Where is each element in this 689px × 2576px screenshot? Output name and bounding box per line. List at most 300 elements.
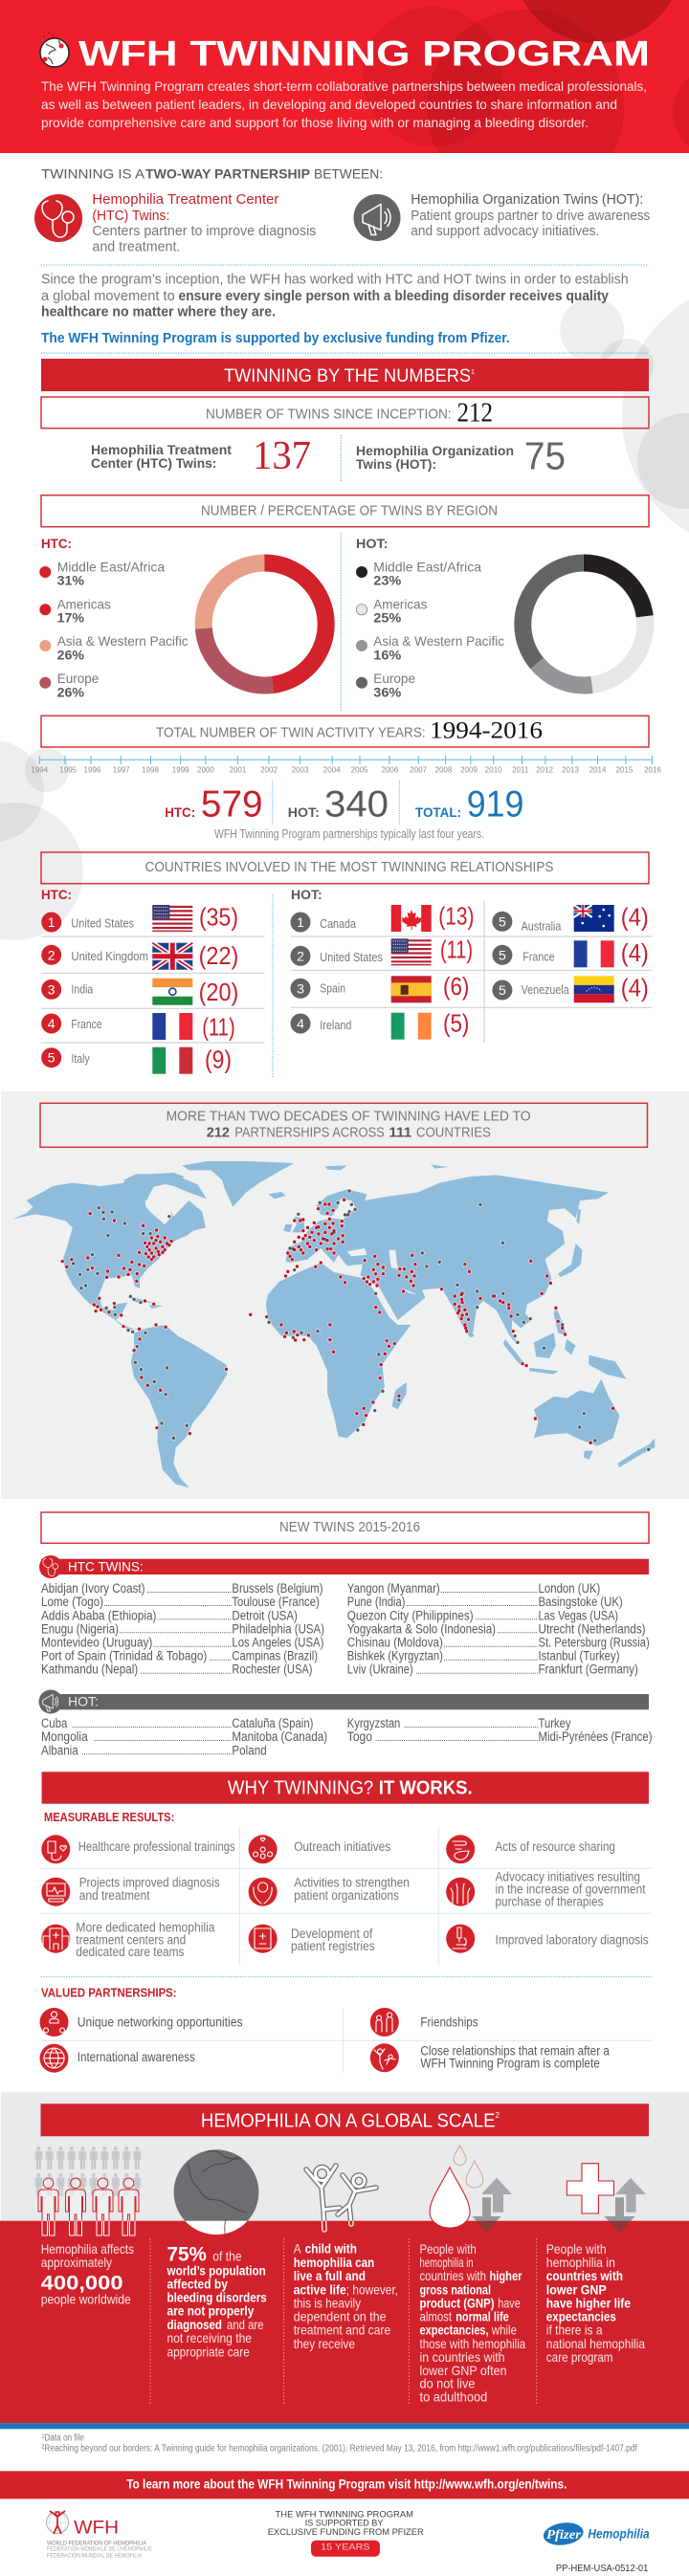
text: lower GNP: care program [546,2349,613,2365]
text: outreach: Outreach initiatives [294,1839,390,1854]
HTC twins text: Hemophilia Treatment Center [92,192,279,208]
text: advocacy: purchase of therapies [496,1894,604,1908]
donut chart: HTC [204,562,326,685]
text: laboratory: Improved laboratory diagnosis [496,1932,649,1947]
list: new HTC twins: Port of Spain (Trinidad & Tobago) [41,1649,207,1663]
bar: HTC twins: HTC TWINS: [68,1559,144,1574]
text: lower GNP: lower GNP [546,2281,607,2297]
icon: children jumping [370,2043,399,2072]
box: partnerships heading: MORE THAN TWO DECADES OF TWINNING HAVE LED TO [167,1109,531,1125]
icon: raised hands [446,1878,475,1906]
text: child with hemophilia: hemophilia can [294,2255,374,2270]
icon: registry book [249,1925,278,1953]
heading: measurable results: MEASURABLE RESULTS: [44,1810,174,1824]
timeline: 1998 [142,766,159,775]
footnotes: ¹Data on file [42,2433,84,2444]
HTC country ranking: (11) [202,1012,235,1041]
HOT country ranking: (6) [443,972,469,1001]
list: new HTC twins: Frankfurt (Germany) [538,1662,638,1677]
logo: Pfizer Hemophilia [542,2521,650,2547]
list: new HTC twins: Toulouse (France) [232,1595,320,1609]
stat: HOT years: 340 [324,784,389,825]
list: new HTC twins: Lviv (Ukraine) [347,1662,413,1677]
icon: hands with globe [249,1878,278,1906]
icon: hospital [41,1925,70,1953]
partnership heading [41,166,383,182]
note: partnerships last: WFH Twinning Program partnerships typically last four years. [214,827,484,841]
list: new HTC twins: Quezon City (Philippines) [347,1608,474,1622]
HTC region legend [39,536,188,699]
HOT region legend: Europe [373,671,415,686]
text: 75 percent: appropriate care [167,2344,250,2359]
text: 400,000 people: approximately [41,2255,112,2270]
text: activities: patient organizations [294,1888,399,1903]
intro text: as well as between patient leaders, in developing and developed countries to share information and [41,97,617,112]
text: higher GNP: product (GNP) [419,2295,495,2310]
stat: HTC years: HTC: [165,804,195,820]
text: registries [291,1926,375,1953]
HOT country ranking: (11) [440,936,473,964]
list: new HTC twins: Rochester (USA) [232,1662,312,1677]
HTC region legend: Americas [57,596,111,611]
icon: outreach [249,1835,278,1863]
text: child with hemophilia: live a full and [294,2268,366,2283]
box: countries [41,852,649,884]
text: advocacy [496,1870,646,1908]
HOT country ranking: (13) [438,902,475,931]
text: 75 percent: bleeding disorders [167,2290,267,2305]
HTC country ranking: 3 [48,981,56,997]
logo: WFH: FEDERACIÓN MUNDIAL DE HEMOFILIA [47,2550,143,2559]
heading: valued partnerships: VALUED PARTNERSHIPS: [41,1986,177,2000]
text: 75 percent: not receiving the [167,2330,252,2345]
text: 400,000 people: Hemophilia affects [41,2241,134,2257]
text: higher GNP: normal life [456,2309,509,2324]
list: new HTC twins: Lome (Togo) [41,1595,103,1609]
HTC country ranking: India [71,981,94,996]
timeline: 2015 [616,766,633,775]
bar: HOT: HOT: [68,1693,99,1708]
timeline: 2014 [589,766,607,775]
list: new HOT twins: Kyrgyzstan [347,1716,400,1730]
logo: Pfizer Hemophilia: Pfizer [546,2528,582,2543]
HTC country ranking: (20) [199,978,238,1006]
HOT country ranking: (5) [443,1008,469,1037]
icon: globe [40,33,69,67]
timeline: 1999 [172,766,189,775]
text: dedicated centers [76,1920,215,1959]
text: higher GNP: expectancies, [419,2323,489,2338]
timeline: 1997 [113,766,130,775]
HTC region legend: Middle East/Africa [57,559,165,574]
text: lower GNP: hemophilia in [546,2255,615,2270]
list: new HTC twins: Campinas (Brazil) [232,1649,318,1663]
HTC region legend: 26% [57,647,85,662]
list: new HTC twins: Addis Ababa (Ethiopia) [41,1608,157,1622]
text: close relationships: WFH Twinning Program is complete [420,2057,600,2071]
intro text: The WFH Twinning Program creates short-term collaborative partnerships between medical professionals, [41,78,647,94]
text: advocacy: Advocacy initiatives resulting [496,1870,640,1884]
logo: WFH: WFH [74,2518,119,2538]
list: new HOT twins: Albania [41,1743,78,1757]
text: higher GNP: countries with [419,2268,486,2283]
list: new HTC twins: Abidjan (Ivory Coast) [41,1581,145,1596]
timeline: 2005 [351,766,368,775]
HOT country ranking: (4) [621,938,649,967]
stat: total years: TOTAL: [415,804,461,820]
text: 75 percent [167,2243,267,2359]
icon: monitor [41,1878,70,1906]
text: dedicated centers: dedicated care teams [76,1945,185,1959]
inception paragraph: ensure every single person with a bleeding disorder receives quality [178,289,609,304]
icon: blood bag [41,1835,70,1863]
HOT region legend [356,536,504,699]
title: WFH TWINNING PROGRAM [78,34,650,73]
text: lower GNP: have higher life [546,2295,631,2310]
logo: WFH [46,2511,152,2559]
partnership heading: TWO-WAY PARTNERSHIP [145,166,310,182]
logo: WFH: WORLD FEDERATION OF HEMOPHILIA [47,2540,147,2546]
timeline: 2013 [562,766,579,775]
HOT region legend: Middle East/Africa [373,559,481,574]
box: new twins: NEW TWINS 2015-2016 [279,1519,420,1535]
text: advocacy: in the increase of government [496,1882,646,1896]
HOT region legend: 36% [373,684,402,699]
HTC twins text [92,192,316,255]
banner: why twinning: IT WORKS. [379,1778,473,1799]
HTC country ranking: (22) [199,941,238,970]
icon: resource sharing [446,1835,475,1863]
text: child with hemophilia [294,2241,398,2351]
text: higher GNP: to adulthood [419,2389,487,2405]
text: lower GNP [546,2241,645,2365]
intro text [41,78,647,130]
HOT country ranking: Australia [522,919,562,934]
text: 75 percent: 75% [167,2243,207,2265]
list: new HTC twins: Brussels (Belgium) [232,1581,323,1596]
HOT country ranking: (4) [621,974,649,1002]
box: activity years: 1994-2016 [430,718,543,744]
text: higher GNP: in countries with [419,2349,505,2365]
text: projects: and treatment [79,1888,150,1903]
timeline [31,756,661,775]
icon: cross [567,2164,614,2213]
icon: globe [40,2044,69,2073]
HOT country ranking: 1 [297,914,304,930]
timeline: 2012 [536,766,553,775]
box: partnerships heading: 212 [207,1124,230,1140]
box: twins by region [41,495,649,527]
stat: HOT years: HOT: [288,804,320,820]
partnership heading: TWINNING IS A [41,166,145,182]
text: lower GNP: if there is a [546,2323,603,2338]
text: 75 percent: are not properly [167,2303,255,2319]
text: child with hemophilia: child with [305,2241,357,2257]
banner: twinning by the numbers: TWINNING BY THE NUMBERS [224,365,471,386]
list: new HTC twins: Yangon (Myanmar) [347,1581,440,1596]
partnership heading: BETWEEN: [314,166,383,182]
decorative grey circles right [560,281,689,551]
stat: HTC twins 137: Center (HTC) Twins: [91,455,216,471]
text: child with hemophilia: they receive [294,2336,355,2351]
text: 400,000 people: people worldwide [41,2291,131,2306]
box: partnerships heading [40,1103,647,1147]
text: child with hemophilia: ; however, [346,2281,398,2297]
HOT region legend: 16% [373,647,402,662]
timeline: 2009 [460,766,478,775]
icon: blood drops [430,2146,483,2228]
list: new HOT twins [41,1716,653,1757]
list: new HTC twins: Istanbul (Turkey) [538,1649,620,1663]
list: new HTC twins: Chisinau (Moldova) [347,1636,443,1650]
funding statement footer: THE WFH TWINNING PROGRAM [276,2510,413,2521]
text: 75 percent: and are [227,2317,264,2332]
HOT country ranking: 5 [499,914,506,929]
box: number of twins [41,397,649,429]
HTC country ranking: 2 [48,947,56,962]
timeline: 2006 [381,766,399,775]
banner: twinning by the numbers: 1 [471,369,475,376]
funding statement: The WFH Twinning Program is supported by exclusive funding from Pfizer. [41,331,510,346]
banner: twinning by the numbers [41,359,649,391]
text: lower GNP: national hemophilia [546,2336,645,2351]
text: higher GNP: those with hemophilia [419,2336,525,2351]
call to action band [0,2471,689,2499]
box: number of twins: NUMBER OF TWINS SINCE INCEPTION: [206,406,452,422]
inception paragraph: healthcare no matter where they are. [41,305,276,320]
HOT twins text: Hemophilia Organization Twins (HOT): [411,192,643,208]
list: new HOT twins: Turkey [538,1716,571,1730]
timeline: 2010 [485,766,502,775]
HTC country ranking: 5 [48,1050,56,1066]
text: 75 percent: of the [212,2248,242,2263]
HOT twins text [411,192,650,239]
HTC twins text: Centers partner to improve diagnosis [92,224,316,239]
stat: total years: 919 [467,784,523,825]
HTC country ranking: 4 [48,1016,56,1031]
stat: HTC twins 137 [91,434,311,478]
HTC twins text: (HTC) Twins: [92,209,169,224]
text: lower GNP: People with [546,2241,607,2257]
text: higher GNP: higher [490,2268,522,2283]
badge: 15 years [311,2541,380,2557]
timeline: 2007 [410,766,428,775]
panel: world map [1,1091,689,1499]
text: 400,000 people [41,2241,134,2306]
HTC country ranking: (9) [205,1046,232,1074]
icon: people [34,2147,141,2235]
donut chart: HOT [522,562,645,685]
list: new HTC twins: Yogyakarta & Solo (Indonesia) [347,1621,496,1636]
panel: hemophilia on a global scale [0,2092,689,2429]
timeline: 2002 [260,766,278,775]
box: number of twins: 212 [457,399,493,429]
timeline: 2011 [512,766,529,775]
timeline: 1995 [59,766,78,775]
icon: networking [40,2008,69,2037]
box: new twins [41,1512,649,1543]
funding statement footer: EXCLUSIVE FUNDING FROM PFIZER [268,2527,424,2538]
text: child with hemophilia: this is heavily [294,2295,361,2310]
text: 75 percent: world’s population [167,2262,266,2278]
logo: Pfizer Hemophilia: Hemophilia [588,2525,650,2541]
box: partnerships heading: PARTNERSHIPS ACROSS [234,1124,385,1140]
list: new HTC twins: Utrecht (Netherlands) [538,1621,646,1636]
stat: HOT twins 75: Twins (HOT): [356,456,436,472]
list: new HTC twins: Pune (India) [347,1595,405,1609]
stat: HOT twins 75: Hemophilia Organization [356,443,514,458]
text: networking: Unique networking opportunities [78,2015,243,2029]
document code: PP-HEM-USA-0512-01 [556,2563,648,2574]
text: higher GNP: hemophilia in [419,2255,474,2270]
footnotes [42,2433,637,2454]
stat: HOT twins 75: 75 [524,434,566,478]
text: child with hemophilia: treatment and care [294,2323,390,2338]
text: projects [79,1876,220,1903]
HOT region legend: HOT: [356,536,389,551]
stat: total years [415,784,523,825]
icon: megaphone [354,194,400,241]
text: higher GNP: have [498,2295,521,2310]
stat: HTC twins 137: 137 [253,434,311,478]
HOT country ranking: Ireland [320,1018,351,1032]
list: new HOT twins: Cuba [41,1716,68,1730]
text: lower GNP: countries with [546,2268,623,2283]
HOT country ranking: 5 [499,947,506,962]
stat: HOT years [288,784,389,825]
stat: HTC years [165,784,263,825]
text: child with hemophilia: A [294,2241,301,2257]
list: new HTC twins: Basingstoke (UK) [538,1595,623,1609]
HTC country ranking: United Kingdom [71,949,148,963]
HTC region legend: HTC: [41,536,72,551]
HOT country ranking: France [522,949,555,963]
HOT twins text: Patient groups partner to drive awareness [411,209,650,224]
stat: HTC years: 579 [201,784,263,825]
list: new HTC twins [41,1581,650,1677]
text: trainings: Healthcare professional trainings [78,1839,235,1854]
text: registries: patient registries [291,1939,375,1953]
inception paragraph: Since the program’s inception, the WFH has worked with HTC and HOT twins in order to establish [41,273,629,288]
badge: 15 years: 15 YEARS [321,2543,370,2553]
stat: HOT twins 75 [356,434,566,478]
text: child with hemophilia: active life [294,2281,346,2297]
timeline: 2016 [644,766,661,775]
HOT region legend: 25% [373,610,402,626]
HOT region legend: Asia & Western Pacific [373,633,504,649]
HOT country ranking: HOT: [291,887,322,902]
inception paragraph: a global movement to [41,289,175,304]
funding statement footer: IS SUPPORTED BY [305,2519,384,2529]
icon: globe americas [174,2149,258,2235]
HOT country ranking: United States [320,950,383,964]
list: new HTC twins: Los Angeles (USA) [232,1636,323,1650]
stat: HTC twins 137: Hemophilia Treatment [91,442,232,457]
icon: children [306,2166,376,2230]
text: higher GNP: lower GNP often [419,2363,507,2378]
text: 75 percent: affected by [167,2276,228,2291]
list: new HTC twins: Philadelphia (USA) [232,1621,324,1636]
HOT twins text: and support advocacy initiatives. [411,224,599,239]
timeline: 2008 [435,766,453,775]
text: activities [294,1876,410,1903]
HOT country ranking: 3 [297,980,304,996]
HTC region legend: 26% [57,684,85,699]
timeline: 2003 [292,766,309,775]
text: higher GNP: while [491,2323,517,2338]
text: close relationships: Close relationships that remain after a [420,2043,610,2058]
text: friendships: Friendships [420,2015,478,2029]
list: new HTC twins: Kathmandu (Nepal) [41,1662,138,1677]
timeline: 1994 [31,766,49,775]
HOT country ranking: Canada [320,916,357,931]
HOT country ranking [291,887,649,1040]
icon: stethoscope [34,194,82,242]
text: 400,000 people: 400,000 [41,2272,123,2294]
HTC country ranking: United States [71,915,134,930]
header panel [0,0,689,153]
text: higher GNP: almost [419,2309,452,2324]
text: dedicated centers: treatment centers and [76,1932,186,1947]
bar: HTC twins [39,1555,649,1578]
icon: up and down arrows [473,2178,512,2233]
list: new HTC twins: Bishkek (Kyrgyztan) [347,1649,443,1663]
list: new HTC twins: Detroit (USA) [232,1608,298,1622]
HTC region legend: Asia & Western Pacific [57,633,189,649]
logo: WFH: FÉDÉRATION MONDIALE DE L’HÉMOPHILIE [47,2544,152,2553]
list: new HOT twins: Cataluña (Spain) [232,1716,313,1730]
HOT region legend: Americas [373,596,427,611]
text: higher GNP [419,2241,525,2405]
banner: global scale: 2 [496,2111,500,2120]
text: dedicated centers: More dedicated hemophilia [76,1920,215,1934]
text: higher GNP: People with [419,2241,477,2257]
text: resource sharing: Acts of resource sharing [496,1839,615,1854]
text: close relationships [420,2043,610,2071]
HOT country ranking: 4 [297,1016,304,1031]
HTC region legend: 17% [57,610,85,626]
box: activity years [41,716,649,747]
timeline: 2004 [323,766,341,775]
icon: microscope [446,1925,475,1953]
bar: HOT [38,1689,649,1714]
box: partnerships heading: COUNTRIES [416,1124,491,1140]
box: partnerships heading: 111 [389,1124,411,1140]
HTC region legend: Europe [57,671,99,686]
HTC country ranking: 1 [48,914,56,930]
text: higher GNP: gross national [419,2281,491,2297]
list: new HTC twins: Las Vegas (USA) [538,1608,618,1622]
box: activity years: TOTAL NUMBER OF TWIN ACTIVITY YEARS: [156,725,426,741]
list: new HOT twins: Togo [347,1729,372,1744]
HTC country ranking: HTC: [41,887,72,902]
HOT region legend: 23% [373,573,402,588]
HOT country ranking: Venezuela [522,982,569,997]
HTC country ranking: France [71,1017,101,1031]
text: higher GNP: do not live [419,2376,476,2391]
timeline: 2000 [197,766,214,775]
list: new HOT twins: Manitoba (Canada) [232,1729,327,1744]
HOT country ranking: Spain [320,980,345,995]
list: new HTC twins: London (UK) [538,1581,600,1596]
icon: friends [370,2008,399,2037]
text: child with hemophilia: dependent on the [294,2309,387,2324]
list: new HTC twins: Montevideo (Uruguay) [41,1636,152,1650]
HTC country ranking: Italy [71,1051,90,1066]
banner: why twinning [42,1772,649,1804]
HTC country ranking: (35) [199,902,238,931]
HOT country ranking: 2 [297,948,304,963]
